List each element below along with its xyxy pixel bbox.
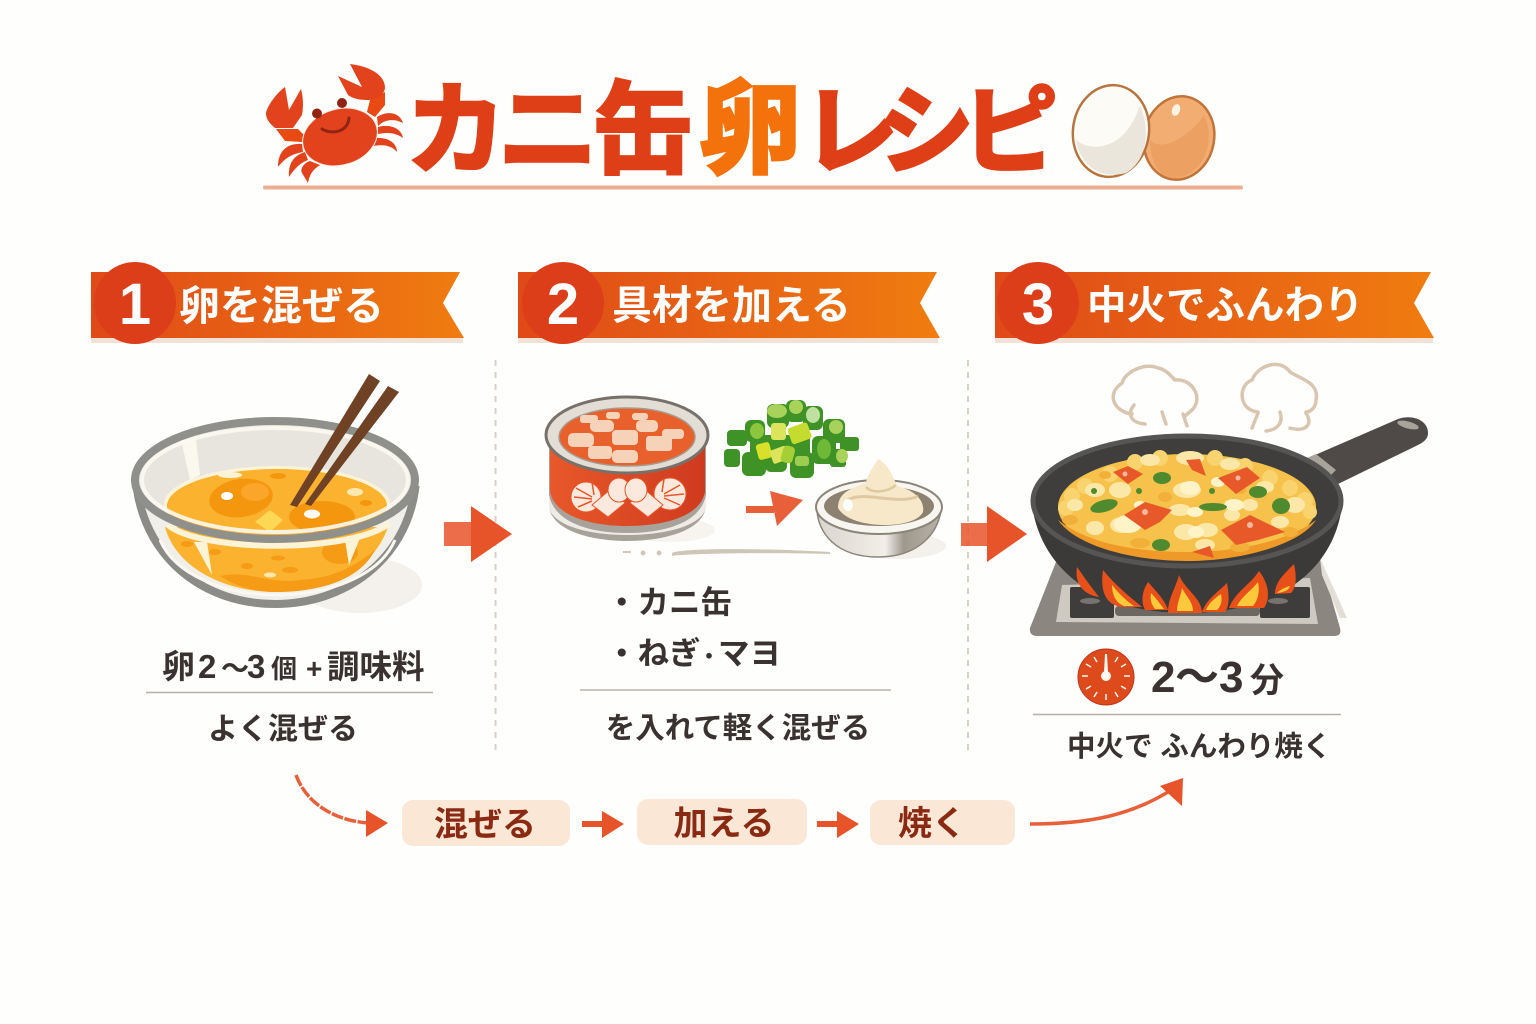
title text bbox=[406, 73, 1058, 187]
decorative dotted ground line bbox=[623, 549, 830, 556]
title text: レシピ bbox=[802, 79, 1058, 186]
step 1 text: 個 bbox=[271, 654, 297, 684]
step 3 text: 中火で ふんわり焼く bbox=[1067, 731, 1331, 763]
pill: mix bbox=[402, 800, 570, 846]
step 1 text bbox=[146, 648, 433, 746]
arrow bbox=[582, 811, 624, 838]
step 2 text: を入れて軽く混ぜる bbox=[606, 712, 870, 745]
pill: mix: 混ぜる bbox=[434, 806, 536, 844]
illustration: steam bbox=[1113, 364, 1316, 431]
step 3 text: 3 bbox=[1219, 653, 1243, 702]
step 1 text: 〜 bbox=[221, 653, 249, 684]
step 1 text: 調味料 bbox=[327, 649, 425, 685]
title header bbox=[265, 64, 1241, 188]
flow summary bbox=[296, 775, 1183, 846]
title text: 卵 bbox=[699, 73, 801, 187]
step 3 text: 2 bbox=[1151, 653, 1175, 702]
icon: timer bbox=[1078, 649, 1134, 705]
arrow: onions to mayo bbox=[746, 491, 803, 526]
curved arrow: end of flow bbox=[1030, 778, 1183, 824]
title underline bbox=[265, 186, 1241, 190]
icon: crab bbox=[266, 64, 403, 183]
step 2 banner: 2 bbox=[547, 272, 579, 337]
arrow: step 1 to step 2 bbox=[444, 506, 512, 562]
step 3 text bbox=[1033, 653, 1341, 763]
step 1 text: 3 bbox=[247, 648, 265, 685]
illustration: frying pan with omelet bbox=[1031, 417, 1428, 613]
step 3 banner: 中火でふんわり bbox=[1087, 284, 1364, 328]
step 1 banner bbox=[91, 262, 464, 344]
pill: cook: 焼く bbox=[898, 805, 966, 843]
arrow bbox=[817, 811, 859, 838]
step 2 text: ・ bbox=[698, 644, 720, 669]
step 3 text: 〜 bbox=[1175, 653, 1219, 702]
step 3 text: 分 bbox=[1250, 662, 1284, 700]
illustration: green onions bbox=[724, 400, 859, 478]
illustration: egg bowl with chopsticks bbox=[135, 374, 422, 613]
step 1 text: よく混ぜる bbox=[208, 713, 358, 746]
step 1 banner: 卵を混ぜる bbox=[179, 283, 384, 329]
icon: burner flames bbox=[1077, 564, 1296, 613]
illustration: mayonnaise bowl bbox=[816, 459, 946, 559]
step 2 text: ・ねぎ bbox=[606, 635, 701, 671]
title text: カニ缶 bbox=[406, 75, 693, 187]
curved arrow: start of flow bbox=[296, 775, 388, 837]
step 2 banner: 具材を加える bbox=[612, 284, 851, 328]
step 2 text bbox=[580, 584, 891, 745]
step 1 banner: 1 bbox=[119, 272, 151, 337]
step 3 banner: 3 bbox=[1022, 272, 1054, 337]
illustration: stove bbox=[1030, 558, 1347, 636]
pill: add: 加える bbox=[674, 805, 774, 843]
icon: eggs bbox=[1067, 80, 1222, 186]
step 1 text: + bbox=[306, 653, 322, 684]
step 2 text: ・カニ缶 bbox=[606, 584, 732, 620]
step 3 banner bbox=[995, 262, 1434, 344]
step 1 text: 卵 bbox=[162, 648, 195, 685]
pill: cook bbox=[870, 800, 1015, 845]
arrow: step 2 to step 3 bbox=[961, 506, 1027, 562]
illustration: crab can bbox=[546, 397, 715, 542]
pill: add bbox=[637, 799, 807, 845]
step 1 text: 2 bbox=[198, 648, 216, 685]
step 2 text: マヨ bbox=[718, 635, 781, 671]
step 2 banner bbox=[518, 262, 940, 344]
